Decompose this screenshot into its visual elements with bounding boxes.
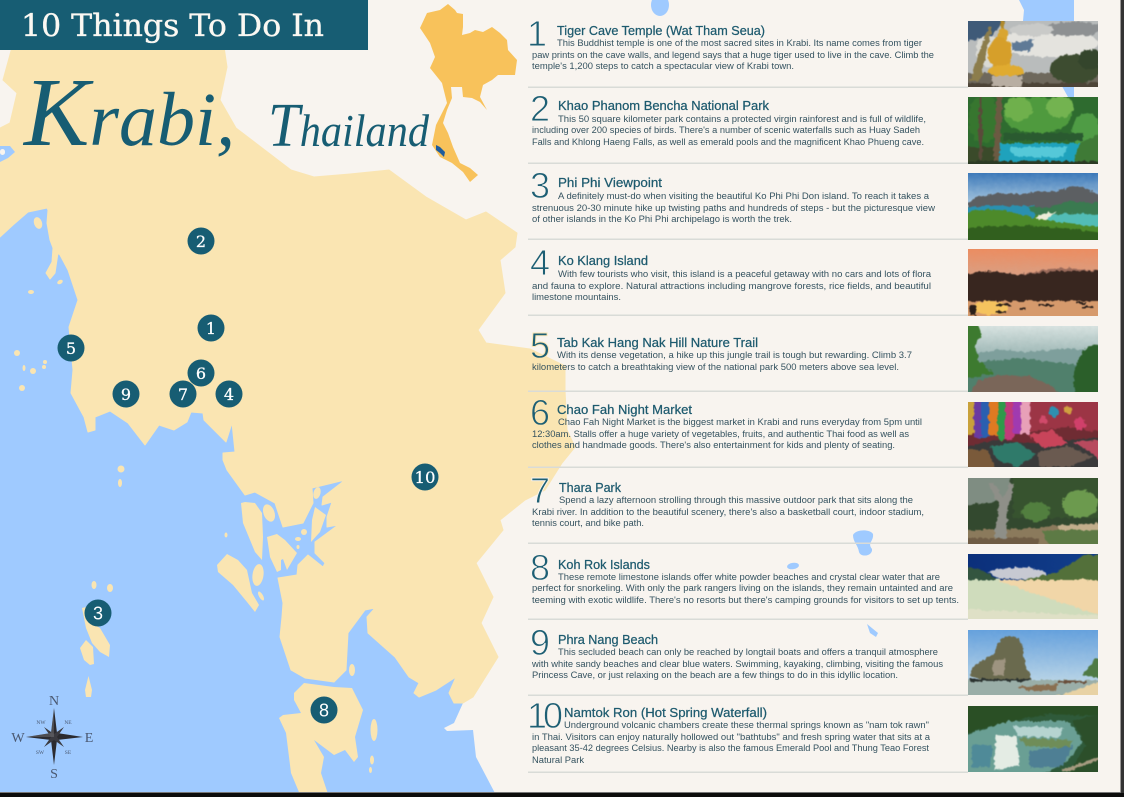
pin 5 — [58, 334, 84, 362]
pin 9 — [112, 380, 140, 408]
compass rose — [11, 694, 93, 782]
panel: item 7: 7 — [530, 470, 550, 511]
text block 10: Underground volcanic chambers create these thermal springs known as "nam tok rawn" — [564, 720, 929, 731]
text block 4: limestone mountains. — [532, 292, 621, 303]
pin 5: 5 — [66, 339, 76, 358]
island: Phi Phi group (3) — [80, 581, 113, 697]
text block 3: of other islands in the Ko Phi Phi archipelago is worth the trek. — [532, 214, 792, 225]
panel: item 5 — [528, 322, 1102, 396]
pin 7: 7 — [178, 385, 188, 404]
panel: item 10 — [527, 695, 1102, 776]
heading 7: Thara Park — [559, 480, 621, 495]
photo: Koh Rok beach — [968, 554, 1098, 619]
heading 9: Phra Nang Beach — [558, 632, 658, 647]
script title: Thailand: Thailand — [268, 91, 430, 160]
text block 1: paw prints on the cave walls, and legend says that a huge tiger used to live in the cave. Climb the — [532, 50, 934, 61]
photo: sunset at Ko Klang — [968, 249, 1098, 316]
photo: golden Buddha at Tiger Cave Temple — [968, 21, 1098, 87]
heading 3: Phi Phi Viewpoint — [558, 175, 662, 190]
text block 10: Natural Park — [532, 755, 584, 766]
text block 9 — [531, 647, 943, 681]
pin 1 — [198, 314, 224, 342]
text block 7: tennis court, and bike path. — [532, 518, 644, 529]
pin 8 — [310, 696, 338, 724]
pin 4: 4 — [224, 385, 234, 404]
pin 9: 9 — [121, 385, 131, 404]
compass rose: S — [50, 767, 58, 782]
text block 3: A definitely must-do when visiting the beautiful Ko Phi Phi Don island. To reach it takes a — [558, 191, 930, 202]
text block 6: Chao Fah Night Market is the biggest market in Krabi and runs everyday from 5pm until — [558, 417, 922, 428]
text block 6: clothes and handmade goods. There's also entertainment for kids and plenty of seating. — [532, 440, 895, 451]
panel: item 4: 4 — [530, 242, 550, 283]
pin 6 — [188, 360, 214, 386]
pin 8: 8 — [319, 700, 329, 720]
text block 7: Spend a lazy afternoon strolling through this massive outdoor park that sits along the — [559, 495, 913, 506]
text block 8 — [532, 572, 959, 606]
text block 6 — [532, 417, 922, 451]
panel: item 3 — [528, 165, 1102, 244]
heading 1: Tiger Cave Temple (Wat Tham Seua) — [557, 23, 765, 38]
panel: item 7 — [528, 470, 1102, 548]
photo: jungle hilltop view — [968, 326, 1098, 392]
panel: item 8 — [528, 547, 1102, 623]
compass rose: NE — [64, 720, 72, 726]
pin 3 — [84, 600, 112, 626]
text block 3: strenuous 20-30 minute hike up twisting paths and hundreds of steps - but the picturesque view — [532, 203, 935, 214]
photo: Thara Park trees and river — [968, 478, 1098, 544]
panel: item 3: 3 — [530, 165, 550, 206]
locator map of Thailand — [420, 4, 517, 182]
photo: night market textiles — [968, 402, 1098, 467]
heading 8: Koh Rok Islands — [558, 557, 650, 572]
text block 5: With its dense vegetation, a hike up this jungle trail is tough but rewarding. Climb 3.7 — [557, 350, 912, 361]
text block 9: This secluded beach can only be reached by longtail boats and offers a tranquil atmosphere — [558, 647, 938, 658]
heading 2: Khao Phanom Bencha National Park — [558, 98, 769, 113]
panel: item 1: 1 — [527, 13, 547, 54]
heading 5: Tab Kak Hang Nak Hill Nature Trail — [557, 335, 758, 350]
pin 10 — [412, 464, 438, 490]
text block 4 — [532, 269, 932, 303]
text block 4: With few tourists who visit, this island is a peaceful getaway with no cars and lots of flora — [558, 269, 932, 280]
location pins — [58, 228, 438, 724]
text block 4: and fauna to explore. Natural attractions including mangrove forests, rice fields, and beautiful — [532, 281, 931, 292]
land: mainland Krabi — [0, 40, 575, 703]
title banner — [0, 0, 368, 50]
water: inland lakes and top-right bay — [0, 0, 1074, 637]
text block 9: Princess Cave, or just relaxing on the beach are a few things to do in this idyllic location. — [532, 670, 898, 681]
pin 2 — [188, 228, 214, 254]
panel: item 8: 8 — [530, 547, 550, 588]
text block 6: 12:30am. Stalls offer a huge variety of vegetables, fruits, and authentic Thai food as well as — [532, 429, 909, 440]
text block 5: kilometers to catch a breathtaking view of the national park 500 meters above sea level. — [532, 362, 899, 373]
pin 1: 1 — [206, 319, 216, 338]
photo: Phi Phi viewpoint — [968, 173, 1098, 240]
text block 10 — [532, 720, 931, 766]
pin 4 — [216, 380, 242, 408]
text block 10: pleasant 35-42 degrees Celsius. Nearby is also the famous Emerald Pool and Thung Teao Forest — [532, 743, 929, 754]
compass rose: SW — [36, 750, 45, 756]
text block 1 — [532, 38, 934, 72]
photo: Phra Nang limestone rock — [968, 630, 1098, 695]
heading 10: Namtok Ron (Hot Spring Waterfall) — [564, 705, 767, 720]
panel: item 4 — [528, 242, 1102, 320]
text block 7: Krabi river. In addition to the beautiful scenery, there's also a basketball court, indoor stadium, — [532, 507, 924, 518]
pin 3: 3 — [93, 604, 103, 624]
text block 8: teeming with exotic wildlife. There's no resorts but there's camping grounds for visitors to set up tents. — [532, 595, 959, 606]
text block 9: with white sandy beaches and clear blue waters. Swimming, kayaking, climbing, visiting the famous — [531, 659, 943, 670]
text block 7 — [532, 495, 924, 529]
text block 8: perfect for snorkeling. With only the park rangers living on the islands, they remain untainted and are — [532, 583, 953, 594]
panel: item 9: 9 — [530, 622, 550, 663]
panel: item 10: 10 — [527, 695, 563, 736]
pin 7 — [170, 380, 196, 408]
compass rose: SE — [65, 750, 72, 756]
text block 10: in Thai. Visitors can enjoy naturally hollowed out "bathtubs" and fresh spring water that sits at a — [532, 732, 931, 743]
title banner: 10 Things To Do In — [21, 8, 324, 44]
panel: item 6 — [528, 392, 1102, 471]
heading 6: Chao Fah Night Market — [557, 402, 692, 417]
text block 2: including over 200 species of birds. There's a number of scenic waterfalls such as Huay Sadeh — [532, 125, 920, 136]
script title: Krabi: Krabi, — [22, 59, 235, 167]
panel: item 2: 2 — [530, 88, 550, 129]
compass rose: NW — [36, 720, 46, 726]
text block 3 — [532, 191, 935, 225]
panel: item 2 — [528, 88, 1102, 168]
text block 5 — [532, 350, 912, 373]
compass rose: N — [49, 694, 59, 709]
panel: item 1 — [527, 13, 1103, 91]
pin 2: 2 — [196, 232, 206, 251]
island: Koh Lanta area (8) — [279, 683, 363, 797]
text block 2: This 50 square kilometer park contains a protected virgin rainforest and is full of wildlife, — [558, 114, 926, 125]
islands: bay and coastal islets — [14, 216, 378, 773]
pin 6: 6 — [196, 364, 206, 383]
photo: emerald pool in rainforest — [968, 97, 1098, 164]
text block 2 — [532, 114, 926, 148]
heading 4: Ko Klang Island — [558, 253, 648, 268]
text block 1: This Buddhist temple is one of the most sacred sites in Krabi. Its name comes from tiger — [557, 38, 923, 49]
compass rose: E — [85, 731, 93, 746]
pin 10: 10 — [414, 468, 436, 487]
panel: item 9 — [528, 622, 1102, 699]
text block 1: temple's 1,200 steps to catch a spectacular view of Krabi town. — [532, 61, 794, 72]
text block 2: Falls and Khlong Haeng Falls, as well as emerald pools and the magnificent Khao Phueng cave. — [532, 137, 924, 148]
photo: hot spring waterfall — [968, 706, 1098, 772]
text block 8: These remote limestone islands offer white powder beaches and crystal clear water that are — [558, 572, 940, 583]
panel: item 5: 5 — [530, 325, 550, 366]
compass rose: W — [11, 731, 25, 746]
panel: item 6: 6 — [530, 392, 550, 433]
